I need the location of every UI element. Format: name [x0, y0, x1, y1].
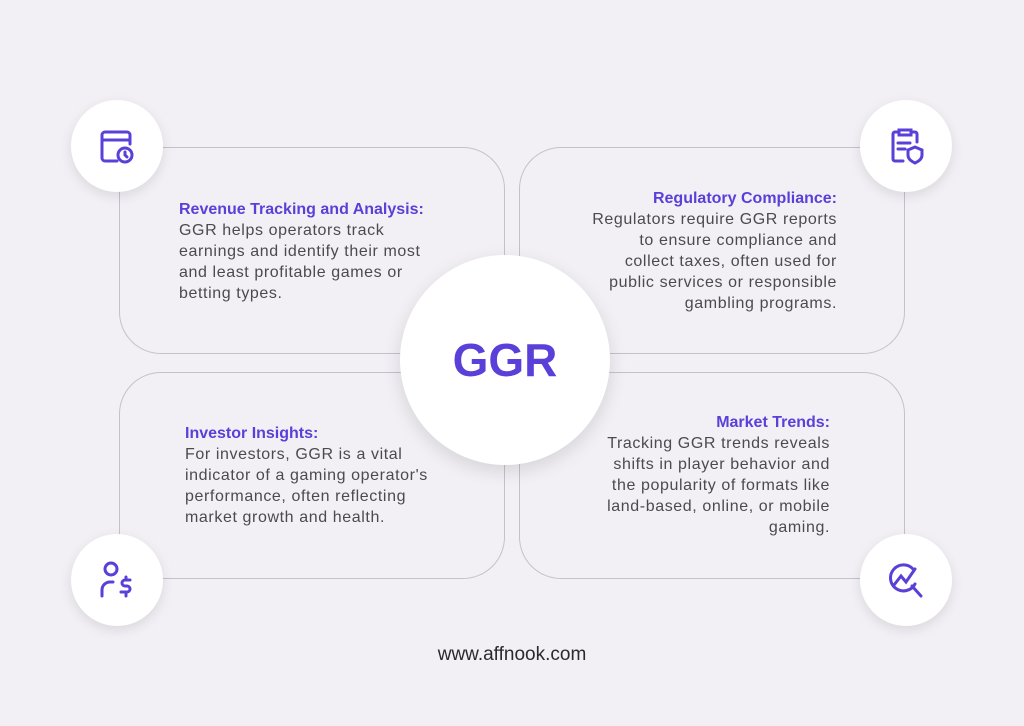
text: revenue	[179, 201, 424, 302]
text: investor: performance, often reflecting	[185, 488, 406, 505]
panel: market	[519, 372, 905, 579]
text: investor: Investor Insights:	[185, 425, 318, 442]
text: market: Tracking GGR trends reveals	[607, 435, 830, 452]
text: regulatory: Regulatory Compliance:	[653, 190, 837, 207]
text: regulatory: public services or responsible	[609, 274, 837, 291]
icon: calendar clock	[71, 100, 163, 192]
text: investor: indicator of a gaming operator's	[185, 467, 428, 484]
icon: search chart	[860, 534, 952, 626]
center circle: GGR	[400, 255, 610, 465]
text: revenue: betting types.	[179, 285, 283, 302]
text: market: shifts in player behavior and	[613, 456, 830, 473]
text: investor	[185, 425, 428, 526]
text: regulatory: to ensure compliance and	[639, 232, 837, 249]
footer url: www.affnook.com	[438, 644, 586, 665]
text: investor: For investors, GGR is a vital	[185, 446, 402, 463]
text: market: the popularity of formats like	[612, 477, 830, 494]
text: revenue: earnings and identify their most	[179, 243, 421, 260]
panel: revenue	[119, 147, 505, 354]
text: market: gaming.	[769, 519, 830, 536]
text: market	[607, 414, 830, 536]
center circle: GGR: GGR	[453, 334, 557, 386]
text: revenue: and least profitable games or	[179, 264, 403, 281]
text: market: Market Trends:	[716, 414, 830, 431]
text: regulatory	[592, 190, 837, 312]
panel: regulatory	[519, 147, 905, 354]
text: regulatory: Regulators require GGR reports	[592, 211, 837, 228]
panel: investor	[119, 372, 505, 579]
icon: clipboard shield	[860, 100, 952, 192]
text: revenue: Revenue Tracking and Analysis:	[179, 201, 424, 218]
text: investor: market growth and health.	[185, 509, 385, 526]
text: regulatory: gambling programs.	[685, 295, 837, 312]
text: revenue: GGR helps operators track	[179, 222, 384, 239]
text: market: land-based, online, or mobile	[607, 498, 830, 515]
icon: person dollar	[71, 534, 163, 626]
text: regulatory: collect taxes, often used for	[625, 253, 837, 270]
